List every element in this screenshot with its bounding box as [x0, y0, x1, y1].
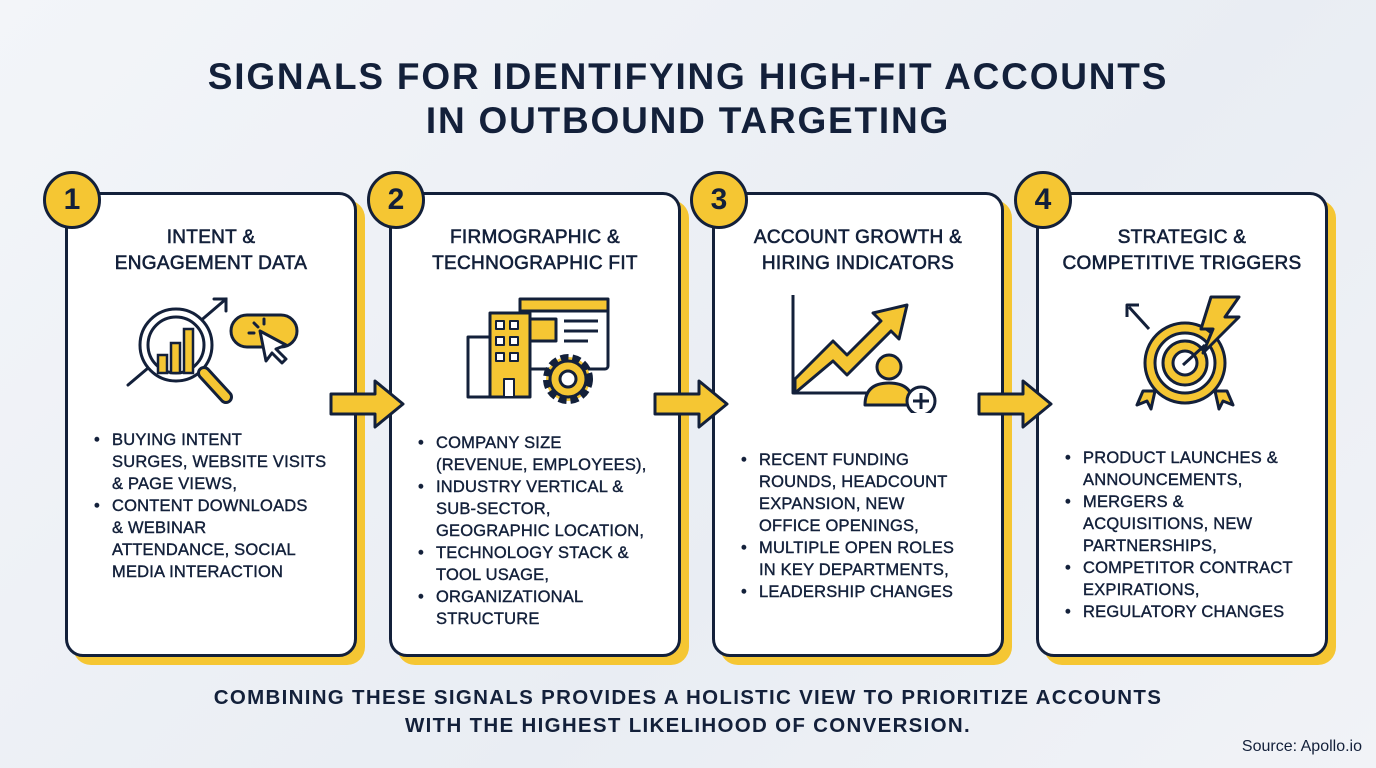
bullets 2: ORGANIZATIONAL	[436, 588, 583, 606]
bullets 3: IN KEY DEPARTMENTS,	[759, 561, 949, 579]
title: SIGNALS FOR IDENTIFYING HIGH-FIT ACCOUNTS	[208, 56, 1168, 97]
heading 2: TECHNOGRAPHIC FIT	[432, 253, 638, 274]
bullets 2: TOOL USAGE,	[436, 566, 549, 584]
icon: target with lightning	[1126, 296, 1240, 411]
bullets 1: ATTENDANCE, SOCIAL	[112, 541, 296, 559]
number badge 1	[43, 171, 101, 229]
bullets 3: RECENT FUNDING	[759, 451, 909, 469]
bullets 1: CONTENT DOWNLOADS	[112, 497, 308, 515]
footer summary: COMBINING THESE SIGNALS PROVIDES A HOLISTIC VIEW TO PRIORITIZE ACCOUNTS	[214, 686, 1162, 709]
source: Source: Apollo.io	[1242, 738, 1362, 755]
bullets 1: & PAGE VIEWS,	[112, 475, 237, 493]
bullets 4: PRODUCT LAUNCHES &	[1083, 449, 1278, 467]
bullets 2	[418, 434, 646, 628]
bullets 4: MERGERS &	[1083, 493, 1184, 511]
bullets 2: TECHNOLOGY STACK &	[436, 544, 629, 562]
bullets 2: COMPANY SIZE	[436, 434, 562, 452]
bullets 4	[1065, 449, 1293, 621]
number badge 3: 3	[711, 183, 727, 216]
panel: intent & engagement	[65, 192, 357, 657]
bullets 1: BUYING INTENT	[112, 431, 242, 449]
bullets 4: COMPETITOR CONTRACT	[1083, 559, 1293, 577]
bullets 3: MULTIPLE OPEN ROLES	[759, 539, 954, 557]
heading 1: INTENT &	[167, 227, 255, 248]
bullets 1: SURGES, WEBSITE VISITS	[112, 453, 326, 471]
heading 2	[432, 227, 638, 274]
heading 4: COMPETITIVE TRIGGERS	[1063, 253, 1301, 274]
bullets 3: ROUNDS, HEADCOUNT	[759, 473, 948, 491]
bullets 4: PARTNERSHIPS,	[1083, 537, 1217, 555]
heading 3: HIRING INDICATORS	[762, 253, 954, 274]
bullets 1: MEDIA INTERACTION	[112, 563, 283, 581]
arrow 2	[654, 380, 729, 429]
arrow 1	[330, 380, 405, 429]
heading 4	[1063, 227, 1301, 274]
bullets 4: ANNOUNCEMENTS,	[1083, 471, 1243, 489]
bullets 3	[741, 451, 954, 601]
number badge 1: 1	[64, 183, 80, 216]
bullets 2: GEOGRAPHIC LOCATION,	[436, 522, 644, 540]
title: IN OUTBOUND TARGETING	[426, 100, 950, 141]
bullets 4: ACQUISITIONS, NEW	[1083, 515, 1252, 533]
bullets 2: STRUCTURE	[436, 610, 540, 628]
panel: firmographic	[389, 192, 681, 657]
icon: growth chart with person	[792, 295, 936, 413]
bullets 2: (REVENUE, EMPLOYEES),	[436, 456, 646, 474]
number badge 2	[367, 171, 425, 229]
panel: strategic	[1036, 192, 1328, 657]
heading 3	[754, 227, 962, 274]
footer summary	[214, 686, 1162, 737]
bullets 2: SUB-SECTOR,	[436, 500, 551, 518]
bullets 1	[94, 431, 326, 581]
heading 1: ENGAGEMENT DATA	[115, 253, 307, 274]
heading 2: FIRMOGRAPHIC &	[450, 227, 620, 248]
panel: growth	[712, 192, 1004, 657]
title	[208, 56, 1168, 141]
number badge 4	[1014, 171, 1072, 229]
arrow 3	[978, 380, 1053, 429]
number badge 3	[690, 171, 748, 229]
bullets 1: & WEBINAR	[112, 519, 206, 537]
heading 3: ACCOUNT GROWTH &	[754, 227, 962, 248]
number badge 4: 4	[1035, 183, 1051, 216]
footer summary: WITH THE HIGHEST LIKELIHOOD OF CONVERSION.	[405, 714, 971, 737]
bullets 3: LEADERSHIP CHANGES	[759, 583, 953, 601]
number badge 2: 2	[388, 183, 404, 216]
bullets 4: EXPIRATIONS,	[1083, 581, 1200, 599]
bullets 2: INDUSTRY VERTICAL &	[436, 478, 624, 496]
icon: buildings, browser, gear	[466, 298, 610, 404]
bullets 3: OFFICE OPENINGS,	[759, 517, 919, 535]
heading 1	[115, 227, 308, 274]
bullets 3: EXPANSION, NEW	[759, 495, 905, 513]
bullets 4: REGULATORY CHANGES	[1083, 603, 1284, 621]
icon: magnifier chart with cursor	[126, 297, 298, 404]
heading 4: STRATEGIC &	[1118, 227, 1246, 248]
